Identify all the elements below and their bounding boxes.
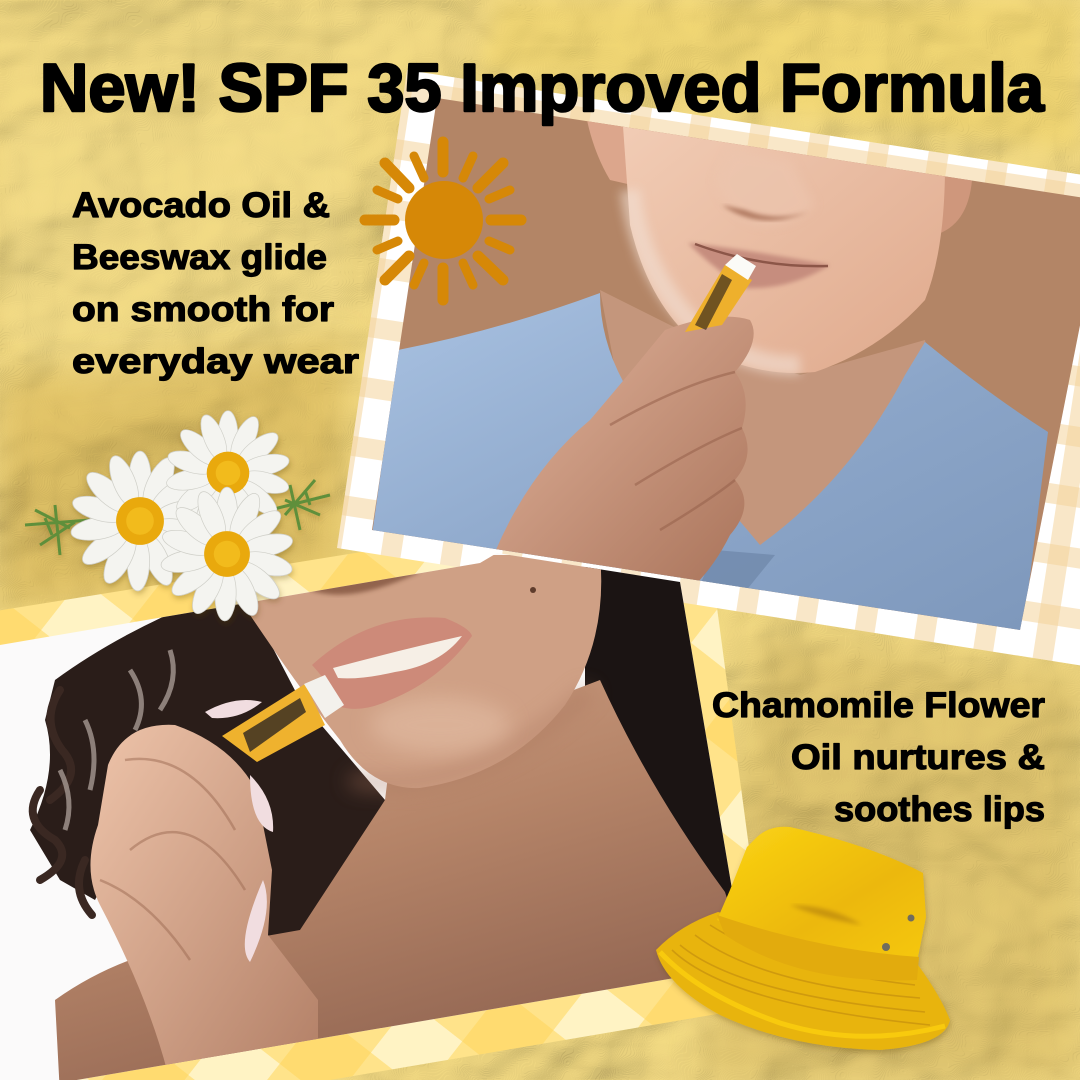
text block: avocado oil and beeswax <box>72 186 359 381</box>
woman's fingernails <box>205 700 273 962</box>
woman's hand <box>90 725 318 1080</box>
text block: chamomile flower oil: Chamomile Flower <box>712 686 1045 725</box>
panel: man applying lip balm photo <box>360 90 1080 650</box>
text block: avocado oil and beeswax: Beeswax glide <box>72 238 327 277</box>
text block: avocado oil and beeswax: Avocado Oil & <box>72 186 330 225</box>
man's lips <box>688 243 830 288</box>
panel: bottom photo yellow diamond frame <box>0 495 770 1080</box>
woman's teeth <box>333 636 462 678</box>
man's nose shadow <box>799 206 800 207</box>
man's ear left <box>587 121 627 184</box>
man's ear right <box>935 174 972 232</box>
text block: avocado oil and beeswax: on smooth for <box>72 290 334 329</box>
woman's lips <box>312 617 472 709</box>
woman's jaw shadow <box>350 690 590 783</box>
hat crown fold <box>790 905 862 925</box>
woman's nose shadow <box>310 574 419 597</box>
icon: yellow bucket hat <box>656 827 950 1050</box>
hat brim <box>656 912 950 1050</box>
text block: chamomile flower oil: soothes lips <box>834 790 1045 829</box>
woman's curly hair left <box>30 604 385 936</box>
man's neck <box>600 290 926 545</box>
chamomile flower bottom <box>159 487 295 621</box>
man's hand <box>495 317 754 585</box>
hat crown <box>717 827 926 957</box>
text block: chamomile flower oil <box>712 686 1045 829</box>
woman's dark hair right <box>585 566 732 898</box>
woman's face <box>238 555 601 788</box>
text block: avocado oil and beeswax: everyday wear <box>72 342 359 381</box>
panel: woman applying lip balm photo <box>0 550 760 1080</box>
lip balm: man <box>685 254 756 332</box>
woman's mole <box>530 587 536 593</box>
stubble jaw highlight <box>630 190 800 365</box>
lip balm: woman <box>222 675 344 762</box>
text block: chamomile flower oil: Oil nurtures & <box>791 738 1045 777</box>
man's shirt <box>372 293 1048 640</box>
icon: chamomile flowers <box>25 411 330 621</box>
hat band <box>717 915 919 980</box>
man's face <box>622 112 945 373</box>
shirt placket <box>702 550 775 588</box>
chamomile flower top <box>165 411 291 536</box>
icon: sun <box>365 142 521 300</box>
chamomile foliage <box>25 480 330 555</box>
panel: top photo plaid frame <box>337 70 1080 667</box>
hat eyelets <box>882 943 890 951</box>
title: New! SPF 35 Improved Formula <box>40 50 1045 126</box>
woman's face highlight <box>370 697 510 753</box>
woman's chest shoulder skin <box>55 680 760 1080</box>
chamomile flower left <box>69 451 211 591</box>
